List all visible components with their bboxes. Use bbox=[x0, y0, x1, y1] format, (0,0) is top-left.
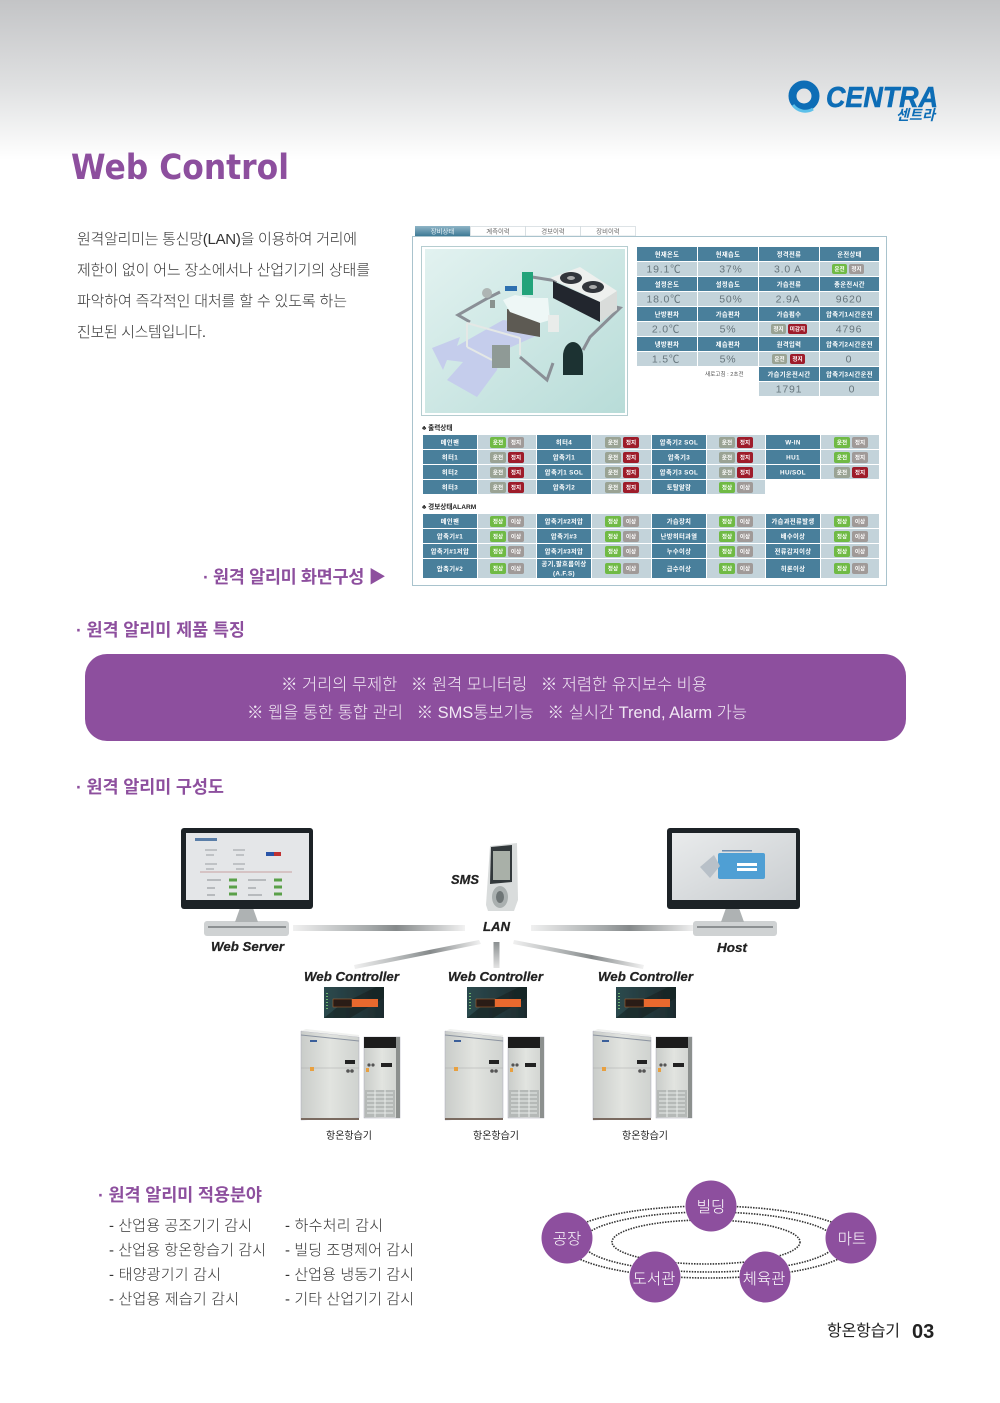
label: Host: Host bbox=[717, 940, 748, 955]
diagram: system configuration bbox=[181, 828, 800, 1142]
node: mart bbox=[826, 1212, 876, 1264]
status table: 9620 bbox=[836, 294, 862, 306]
output status table: 압축기3 SOL bbox=[660, 468, 698, 476]
output status table: 운전 bbox=[493, 438, 503, 446]
alarm status table: 이상 bbox=[855, 564, 865, 572]
status table: 19.1℃ bbox=[647, 264, 681, 276]
alarm status table: 정상 bbox=[722, 518, 732, 526]
unit label 3: 항온항습기 bbox=[622, 1130, 668, 1142]
alarm status table: 압축기#1 bbox=[437, 532, 463, 540]
alarm status table: 정상 bbox=[493, 548, 503, 556]
heading: system diagram: · 원격 알리미 구성도 bbox=[76, 777, 224, 797]
node: building bbox=[686, 1180, 736, 1232]
status table: 새로고침 : 2초전 bbox=[705, 370, 744, 378]
output status table: 정지 bbox=[740, 468, 750, 476]
alarm status table: 이상 bbox=[740, 518, 750, 526]
output status table: 운전 bbox=[608, 438, 618, 446]
status table: 1791 bbox=[776, 384, 802, 396]
status table: 압축기2시간운전 bbox=[826, 340, 873, 348]
output status table: 정지 bbox=[740, 454, 750, 462]
label: Web Server: Web Server bbox=[211, 939, 285, 954]
air conditioning units 3 bbox=[593, 1029, 692, 1120]
unit label 1: 항온항습기 bbox=[326, 1130, 372, 1142]
footer: page label: 03 bbox=[912, 1321, 934, 1343]
alarm status table: 이상 bbox=[511, 532, 521, 540]
list: applications: - 하수처리 감시 bbox=[285, 1218, 383, 1234]
web server monitor bbox=[181, 828, 313, 936]
node: factory bbox=[542, 1212, 592, 1264]
status table: 현재온도 bbox=[655, 250, 679, 258]
alarm status table: 메인팬 bbox=[441, 516, 459, 526]
logo: Centra bbox=[792, 82, 938, 124]
output status table: 운전 bbox=[493, 468, 503, 476]
alarm status table: (A.F.S) bbox=[553, 570, 575, 578]
logo: Centra: CENTRA bbox=[826, 82, 938, 114]
panel: features band: ※ 거리의 무제한 ※ 원격 모니터링 ※ 저렴한 유지보수 비용 bbox=[281, 675, 707, 694]
alarm status table: 공기,팔흐름이상 bbox=[541, 559, 587, 568]
status table: 미감지 bbox=[790, 325, 805, 333]
status table bbox=[637, 247, 879, 396]
node: gym: 체육관 bbox=[743, 1270, 785, 1288]
title: Web Control bbox=[71, 148, 289, 188]
label: Web Controller 3: Web Controller bbox=[598, 969, 694, 984]
output status table: 운전 bbox=[722, 454, 732, 462]
list: applications: - 산업용 공조기기 감시 bbox=[109, 1218, 252, 1234]
output status table: 정지 bbox=[511, 438, 521, 446]
output status table: 히터3 bbox=[442, 482, 458, 492]
output status table: HU1 bbox=[786, 454, 800, 462]
status table: 총운전시간 bbox=[834, 280, 865, 288]
alarm status table: 정상 bbox=[608, 518, 618, 526]
status table: 18.0℃ bbox=[647, 294, 681, 306]
output status table bbox=[423, 435, 879, 494]
status table: 37% bbox=[719, 264, 743, 276]
alarm status table: 이상 bbox=[511, 518, 521, 526]
node: library: 도서관 bbox=[633, 1270, 675, 1288]
output status table: 정지 bbox=[855, 468, 865, 476]
alarm status table: 정상 bbox=[837, 564, 847, 572]
air conditioning units 2 bbox=[445, 1029, 544, 1120]
screen tabs: 계측이력 bbox=[486, 226, 510, 236]
alarm status table: 배수이상 bbox=[781, 532, 805, 540]
output status table: 정지 bbox=[855, 438, 865, 446]
status table: 0 bbox=[846, 354, 852, 366]
alarm status table: 압축기#2저압 bbox=[545, 516, 583, 526]
alarm status table: 정상 bbox=[608, 532, 618, 540]
output status table: 정상 bbox=[722, 484, 732, 492]
screen tabs: 경보이력 bbox=[541, 226, 565, 236]
phone bbox=[486, 843, 518, 911]
alarm status table bbox=[423, 514, 879, 578]
output status table: 압축기3 bbox=[668, 452, 690, 462]
intro paragraph: 제한이 없이 어느 장소에서나 산업기기의 상태를 bbox=[77, 262, 370, 279]
footer: page label bbox=[827, 1321, 934, 1343]
alarm status table: 압축기#1저압 bbox=[431, 546, 469, 556]
panel: features band bbox=[85, 654, 906, 741]
node: mart: 마트 bbox=[838, 1230, 866, 1248]
alarm status table: 정상 bbox=[493, 532, 503, 540]
node: gym bbox=[740, 1252, 790, 1302]
host monitor bbox=[667, 828, 800, 936]
label: Web Controller 1: Web Controller bbox=[304, 969, 400, 984]
output status table: 정지 bbox=[626, 484, 636, 492]
alarm status table: 정상 bbox=[722, 548, 732, 556]
output status table: 압축기1 bbox=[553, 452, 575, 462]
controller 1 bbox=[324, 987, 384, 1018]
status table: 설정습도 bbox=[716, 280, 740, 288]
status table: 정격전류 bbox=[777, 250, 801, 258]
output status table: 정지 bbox=[626, 438, 636, 446]
output status table: 압축기2 bbox=[553, 482, 575, 492]
list: applications bbox=[109, 1218, 414, 1308]
status table: 가습편차 bbox=[716, 310, 740, 318]
alarm status table: 압축기#2 bbox=[437, 564, 463, 573]
alarm status heading: ♣ 경보상태ALARM bbox=[422, 502, 477, 511]
output status table: 히터1 bbox=[442, 452, 458, 462]
status table: 가습전류 bbox=[777, 280, 801, 288]
alarm status table: 이상 bbox=[740, 548, 750, 556]
alarm status table: 이상 bbox=[626, 548, 636, 556]
label: Web Controller 2: Web Controller bbox=[448, 969, 544, 984]
alarm status table: 이상 bbox=[626, 564, 636, 572]
connection lines bbox=[293, 925, 695, 969]
controller 2 bbox=[467, 987, 527, 1018]
output status table: 운전 bbox=[722, 438, 732, 446]
list: applications: - 태양광기기 감시 bbox=[109, 1266, 221, 1284]
alarm status table: 정상 bbox=[493, 564, 503, 572]
status table: 압축기1시간운전 bbox=[826, 310, 873, 318]
output status table: 운전 bbox=[837, 468, 847, 476]
alarm status table: 이상 bbox=[511, 564, 521, 572]
status table: 정지 bbox=[792, 355, 803, 363]
status table: 1.5℃ bbox=[652, 354, 680, 366]
status table: 정지 bbox=[773, 325, 784, 333]
output status table: 정지 bbox=[855, 454, 865, 462]
status table: 5% bbox=[720, 354, 736, 366]
output status table: 운전 bbox=[837, 438, 847, 446]
controller 3 bbox=[616, 987, 676, 1018]
output status table: 압축기2 SOL bbox=[660, 438, 698, 446]
status table: 50% bbox=[719, 294, 743, 306]
status table: 가습펌수 bbox=[777, 310, 801, 318]
screen tabs: 장비상태 bbox=[431, 226, 454, 236]
alarm status table: 이상 bbox=[855, 532, 865, 540]
top gradient band bbox=[0, 0, 1000, 160]
status table: 운전 bbox=[774, 355, 785, 363]
alarm status table: 정상 bbox=[837, 532, 847, 540]
alarm status table: 가습과전류발생 bbox=[771, 516, 815, 526]
status table: 3.0 A bbox=[774, 264, 802, 276]
intro paragraph: 진보된 시스템입니다. bbox=[77, 324, 206, 341]
illustration: air handling system bbox=[422, 246, 628, 416]
output status table: 압축기1 SOL bbox=[545, 468, 583, 476]
status table: 5% bbox=[720, 324, 736, 336]
label: SMS: SMS bbox=[451, 872, 479, 887]
output status table: 히터4 bbox=[556, 438, 572, 446]
alarm status table: 압축기#3 bbox=[551, 532, 577, 540]
status table: 냉방편차 bbox=[655, 340, 679, 348]
alarm status table: 정상 bbox=[608, 548, 618, 556]
status table: 제습편차 bbox=[716, 340, 740, 348]
heading: product features: · 원격 알리미 제품 특징 bbox=[76, 620, 245, 640]
status table: 가습기운전시간 bbox=[767, 370, 811, 378]
output status table: 운전 bbox=[608, 468, 618, 476]
status table: 원격입력 bbox=[777, 340, 801, 348]
panel: features band: ※ 웹을 통한 통합 관리 ※ SMS통보기능 ※ 실시간 Trend, Alarm 가능 bbox=[247, 703, 747, 722]
output status table: W-IN bbox=[785, 440, 801, 446]
alarm status table: 이상 bbox=[855, 518, 865, 526]
output status table: 운전 bbox=[722, 468, 732, 476]
output status table: 운전 bbox=[493, 454, 503, 462]
output status table: HU/SOL bbox=[780, 470, 806, 476]
alarm status table: 정상 bbox=[608, 564, 618, 572]
alarm status table: 난방히터과열 bbox=[661, 532, 697, 540]
output status table: 운전 bbox=[837, 454, 847, 462]
output status table: 히터2 bbox=[442, 468, 458, 476]
alarm status table: 누수이상 bbox=[667, 546, 691, 556]
output status table: 메인팬 bbox=[441, 438, 459, 446]
node: building: 빌딩 bbox=[697, 1198, 725, 1216]
list: applications: - 기타 산업기기 감시 bbox=[285, 1291, 414, 1308]
alarm status table: 정상 bbox=[493, 518, 503, 526]
alarm status table: 전류감지이상 bbox=[775, 546, 811, 556]
alarm status table: 압축기#3저압 bbox=[545, 546, 583, 556]
alarm status table: 이상 bbox=[740, 564, 750, 572]
alarm status table: 이상 bbox=[511, 548, 521, 556]
output status table: 정지 bbox=[626, 468, 636, 476]
status table: 0 bbox=[849, 384, 855, 396]
alarm status table: 이상 bbox=[626, 518, 636, 526]
panel: web monitoring screen bbox=[412, 226, 886, 586]
output status table: 운전 bbox=[493, 484, 503, 492]
status table: 난방편차 bbox=[655, 310, 679, 318]
status table: 4796 bbox=[836, 324, 862, 336]
list: applications: - 빌딩 조명제어 감시 bbox=[285, 1242, 414, 1259]
alarm status table: 정상 bbox=[722, 532, 732, 540]
intro paragraph: 파악하여 즉각적인 대처를 할 수 있도록 하는 bbox=[77, 293, 347, 310]
list: applications: - 산업용 항온항습기 감시 bbox=[109, 1242, 266, 1259]
alarm status table: 이상 bbox=[740, 532, 750, 540]
status table: 운전 bbox=[834, 265, 845, 273]
output status table: 정지 bbox=[511, 484, 521, 492]
status table: 설정온도 bbox=[655, 280, 679, 288]
output status table: 정지 bbox=[511, 454, 521, 462]
output status table: 이상 bbox=[740, 484, 750, 492]
alarm status table: 이상 bbox=[626, 532, 636, 540]
logo: Centra: 센트라 bbox=[896, 107, 937, 124]
output status table: 정지 bbox=[626, 454, 636, 462]
diagram: application fields bbox=[542, 1180, 876, 1302]
output status table: 운전 bbox=[608, 454, 618, 462]
alarm status table: 정상 bbox=[837, 548, 847, 556]
status table: 2.9A bbox=[776, 294, 800, 306]
footer: page label: 항온항습기 bbox=[827, 1322, 900, 1340]
screen tabs bbox=[415, 226, 636, 236]
intro paragraph bbox=[77, 231, 370, 341]
alarm status table: 정상 bbox=[722, 564, 732, 572]
output status table: 토탈알람 bbox=[667, 482, 691, 492]
heading: applications: · 원격 알리미 적용분야 bbox=[98, 1185, 262, 1205]
intro paragraph: 원격알리미는 통신망(LAN)을 이용하여 거리에 bbox=[77, 231, 357, 248]
list: applications: - 산업용 제습기 감시 bbox=[109, 1291, 239, 1308]
status table: 2.0℃ bbox=[652, 324, 680, 336]
screen caption: · 원격 알리미 화면구성 ▶ bbox=[203, 567, 386, 587]
alarm status table: 이상 bbox=[855, 548, 865, 556]
node: library bbox=[630, 1252, 680, 1302]
alarm status table: 급수이상 bbox=[667, 564, 691, 573]
status table: 압축기3시간운전 bbox=[826, 370, 873, 378]
output status heading: ♣ 출력상태 bbox=[422, 423, 452, 432]
output status table: 정지 bbox=[511, 468, 521, 476]
output status table: 운전 bbox=[608, 484, 618, 492]
list: applications: - 산업용 냉동기 감시 bbox=[285, 1266, 414, 1284]
status table: 현재습도 bbox=[716, 250, 740, 258]
screen tabs: 장비이력 bbox=[596, 226, 620, 236]
status table: 운전상태 bbox=[837, 250, 862, 258]
unit label 2: 항온항습기 bbox=[473, 1130, 519, 1142]
output status table: 정지 bbox=[740, 438, 750, 446]
alarm status table: 정상 bbox=[837, 518, 847, 526]
alarm status table: 가습장치 bbox=[667, 516, 691, 526]
node: factory: 공장 bbox=[553, 1230, 581, 1248]
status table: 정지 bbox=[851, 265, 862, 273]
air conditioning units 1 bbox=[301, 1029, 400, 1120]
alarm status table: 히론이상 bbox=[781, 564, 805, 573]
label: LAN: LAN bbox=[483, 919, 511, 934]
